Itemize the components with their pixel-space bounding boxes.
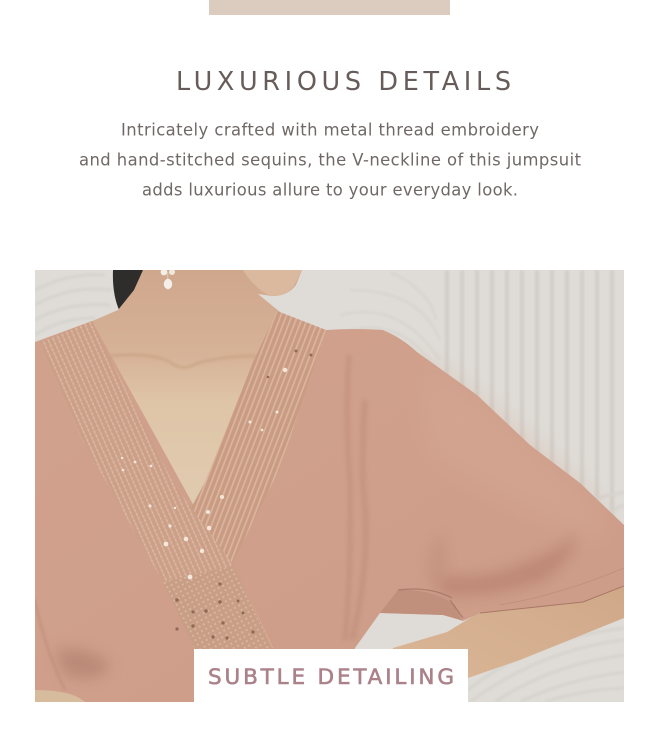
photo: model in blush jumpsuit <box>35 269 624 702</box>
sequins <box>121 368 287 579</box>
hand at left bottom <box>35 690 85 702</box>
label: subtle detailing <box>194 649 468 702</box>
top colour bar <box>209 0 450 15</box>
jumpsuit body and sleeve <box>35 311 624 702</box>
body text: Intricately crafted with metal thread embroidery <box>121 120 539 140</box>
dark sequins <box>175 350 312 640</box>
title: LUXURIOUS DETAILS <box>176 67 511 97</box>
right neckline band <box>190 311 326 568</box>
hair <box>112 270 143 310</box>
earring: pearl <box>161 269 175 289</box>
lower band <box>164 566 269 649</box>
collarbone shadow <box>110 355 256 368</box>
neck and chest skin <box>90 270 302 510</box>
fabric shading <box>35 355 624 690</box>
arm <box>393 586 624 678</box>
left neckline band <box>40 321 273 648</box>
photo background wall <box>35 270 624 702</box>
body text <box>79 120 582 200</box>
body text: adds luxurious allure to your everyday look. <box>142 180 518 200</box>
label: subtle detailing: SUBTLE DETAILING <box>208 665 454 690</box>
body text: and hand-stitched sequins, the V-neckline of this jumpsuit <box>79 150 582 170</box>
chin <box>243 270 302 296</box>
